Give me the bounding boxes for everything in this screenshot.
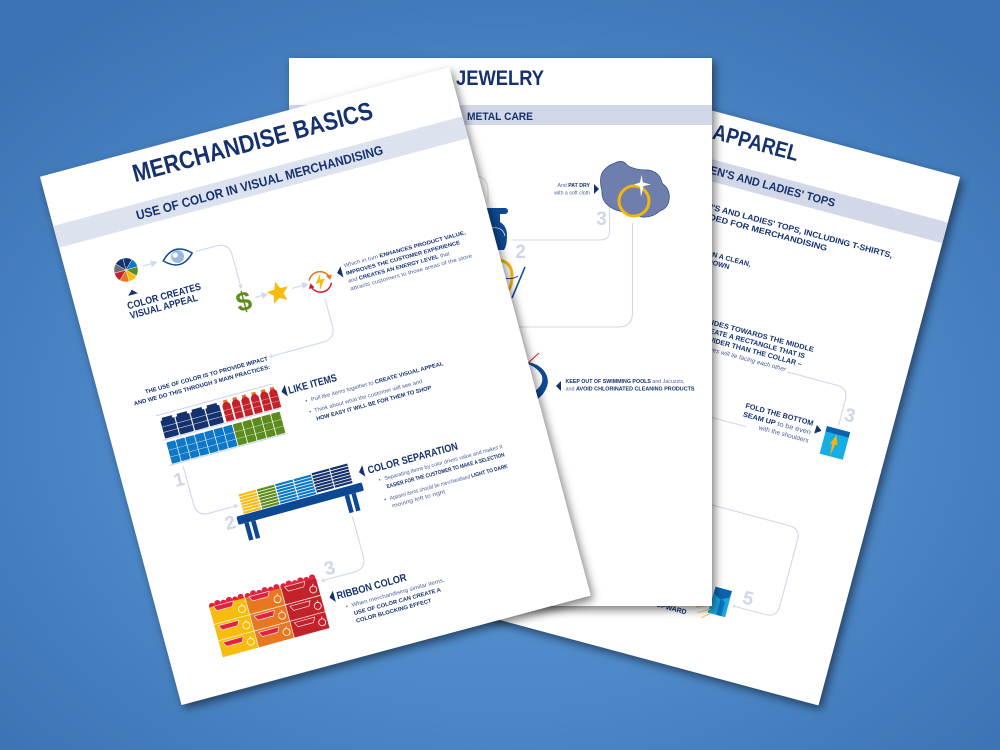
color creates label: COLOR CREATES (126, 282, 203, 312)
connector: step 2 to 3 (309, 517, 367, 581)
like items bullets: • (305, 398, 308, 405)
pointer (280, 385, 288, 398)
icon: dollar: $ (233, 285, 255, 318)
icon: folded shirt with hand (693, 583, 732, 624)
icon: folded top (820, 426, 850, 460)
ribbon color bullets: When merchandising similar items, (351, 577, 446, 609)
icon: pool ring (528, 353, 548, 400)
jewelry section band (289, 105, 712, 125)
apparel section heading: MEN'S AND LADIES' TOPS (700, 162, 837, 210)
step 1 text: FACE DOWN (687, 253, 730, 271)
color separation bullets: • (384, 497, 387, 503)
like items bullets: HOW EASY IT WILL BE FOR THEM TO SHOP (316, 385, 432, 422)
icon: soap dispenser (480, 208, 525, 298)
label: keep out of pools (566, 379, 695, 393)
like items bullets: Think about what the customer will see and (314, 379, 423, 414)
color separation bullets (378, 444, 511, 511)
arrow tip (234, 503, 239, 509)
pointer (336, 266, 343, 279)
step 2 text: FOLD THE SIDES TOWARDS THE MIDDLE (668, 308, 815, 354)
step 1 text (687, 246, 751, 276)
ribbon color bullets: • (345, 604, 349, 610)
heading: like items: LIKE ITEMS (287, 372, 338, 397)
step 3 text (740, 401, 814, 445)
icon: ring on cloth (600, 161, 669, 217)
step 2 text: WIDER THAN THE COLLAR – (706, 336, 802, 368)
color separation bullets: moving left to right (391, 489, 447, 510)
step 5 label: UPWARD (655, 602, 687, 616)
text: enhances product value: Which in turn ENHANCES PRODUCT VALUE, (343, 230, 467, 269)
apparel intro text: FOLDED FOR MERCHANDISING (691, 208, 828, 253)
arrow tip (238, 284, 244, 289)
illustration: like items shelf (156, 383, 288, 466)
step 2 text (661, 308, 815, 379)
text: enhances product value: and CREATES AN ENERGY LEVEL that (348, 251, 451, 285)
step 2 text: TO CREATE A RECTANGLE THAT IS (688, 323, 806, 360)
icon: color wheel (111, 255, 141, 285)
panel: apparel sheet (410, 68, 960, 705)
apparel intro text: MEN'S AND LADIES' TOPS, INCLUDING T-SHIRTS, (693, 198, 893, 260)
connector: step 2 to 3 (512, 206, 610, 240)
connector: step 1 to 2 (183, 456, 235, 517)
panel: jewelry sheet (289, 58, 712, 606)
apparel title: APPAREL (710, 119, 802, 166)
arrow tip (320, 578, 325, 583)
arrow tip (733, 605, 736, 608)
step number 2: 2 (515, 242, 526, 263)
heading: ribbon color: RIBBON COLOR (335, 572, 408, 602)
text: enhances product value (343, 230, 473, 292)
text: enhances product value: attracts customers to those areas of the store (350, 253, 473, 292)
connector: step 3 to 4 (622, 394, 746, 427)
color creates label (124, 272, 205, 322)
arrow: dollar to star (254, 292, 267, 300)
heading: color separation: COLOR SEPARATION (366, 441, 459, 477)
arrow: star to energy (291, 282, 308, 291)
step number 1: 1 (171, 469, 188, 492)
like items bullets: Pull like items together to CREATE VISUAL APPEAL (310, 361, 445, 403)
label: keep out of pools: and AVOID CHLORINATED CLEANING PRODUCTS (566, 387, 695, 393)
like items bullets (305, 361, 450, 424)
label: keep out of pools: KEEP OUT OF SWIMMING POOLS and Jacuzzis, (566, 379, 685, 385)
label: pat dry: with a soft cloth (554, 190, 590, 196)
practices intro: AND WE DO THIS THROUGH 3 MAIN PRACTICES: (133, 365, 271, 408)
step 3 text: SEAM UP to be even (742, 412, 812, 436)
pointer (328, 591, 336, 603)
step number 3: 3 (596, 209, 607, 230)
apparel section band (534, 113, 948, 243)
panel: merchandise basics sheet (40, 67, 591, 705)
color separation bullets: Separating items by color drives value and makes it (384, 444, 504, 482)
color creates label: VISUAL APPEAL (129, 293, 199, 322)
jewelry section heading: METAL CARE (467, 111, 533, 123)
section band (53, 116, 468, 248)
label: pat dry: And PAT DRY (558, 183, 591, 189)
label: pat dry (554, 183, 591, 196)
connector: step 2 to 3 (778, 372, 848, 425)
connector: eye to dollar (196, 242, 241, 296)
step number 3: 3 (322, 557, 338, 580)
icon: eye (161, 246, 194, 268)
ribbon color bullets: COLOR BLOCKING EFFECT (356, 598, 433, 625)
connector: energy to practices (260, 298, 336, 356)
color separation bullets: EASIER FOR THE CUSTOMER TO MAKE A SELECTION (386, 452, 505, 490)
main title: MERCHANDISE BASICS (129, 97, 376, 188)
like items bullets: • (309, 409, 312, 416)
text: enhances product value: IMPROVES THE CUSTOMER EXPERIENCE (345, 240, 461, 277)
step number 5: 5 (740, 588, 756, 611)
ribbon color bullets (345, 577, 450, 626)
jewelry title: JEWELRY (456, 67, 544, 90)
arrow tip (268, 354, 273, 359)
step number 2: 2 (223, 512, 238, 535)
icon: energy (305, 268, 336, 295)
step 3 text: FOLD THE BOTTOM (744, 401, 814, 428)
connector: step 3 to 4 (500, 223, 632, 327)
icon: star (265, 279, 291, 305)
arrow: wheel to eye (142, 260, 157, 268)
pointer (556, 381, 561, 391)
pointer (357, 465, 365, 478)
section heading: USE OF COLOR IN VISUAL MERCHANDISING (134, 142, 385, 223)
step 2 text: sleeves will lie facing each other (698, 343, 787, 374)
connector: step 4 to 5 (625, 488, 801, 618)
practices intro: THE USE OF COLOR IS TO PROVIDE IMPACT (145, 356, 269, 396)
pointer (594, 184, 599, 194)
pointer (814, 425, 823, 435)
illustration: ribbon color crates (208, 573, 330, 657)
illustration: color separation table (231, 461, 369, 542)
color separation bullets: Apparel items should be merchandised LIGHT TO DARK (389, 464, 509, 502)
ribbon color bullets: USE OF COLOR CAN CREATE A (353, 587, 442, 617)
step 1 text: LAY ON A CLEAN, (691, 246, 751, 269)
step 3 text: with the shoulders (757, 424, 809, 445)
connector: step 1 to 2 (470, 175, 488, 203)
color separation bullets: • (378, 477, 382, 484)
step number 3: 3 (842, 405, 858, 428)
